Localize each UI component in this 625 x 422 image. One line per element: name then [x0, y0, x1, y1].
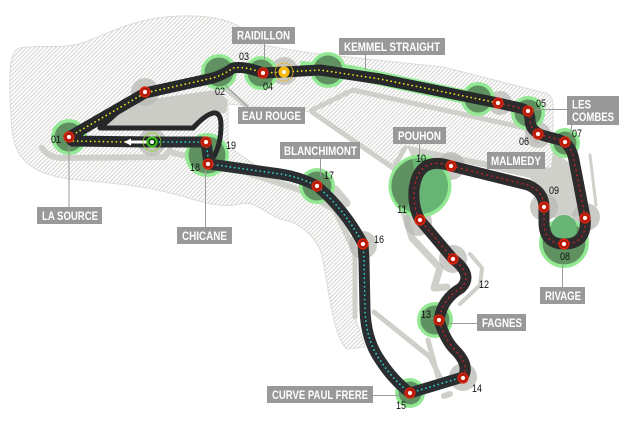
- grey corner markers: [131, 57, 600, 391]
- corner numbers: 15: [396, 400, 406, 412]
- hatched circuit grounds: [10, 16, 553, 349]
- start arrow: [124, 138, 147, 146]
- speed trap marker: [275, 63, 293, 81]
- label: Fagnes: [477, 314, 526, 331]
- label: Malmedy: [487, 152, 545, 169]
- corner numbers: 12: [479, 279, 489, 291]
- label: Blanchimont: [280, 142, 360, 159]
- turn markers: [63, 67, 591, 399]
- label: Curve Paul Frere: [267, 386, 373, 403]
- label: Malmedy: MALMEDY: [491, 156, 541, 168]
- infield paved area: [100, 90, 228, 128]
- pit lane: [100, 110, 221, 158]
- label: Raidillon: RAIDILLON: [237, 30, 290, 42]
- corner numbers: 11: [397, 204, 407, 216]
- label: Curve Paul Frere: CURVE PAUL FRERE: [272, 390, 368, 402]
- corner numbers: 19: [226, 140, 236, 152]
- corner numbers: [51, 51, 582, 412]
- label: Raidillon: [232, 27, 295, 44]
- label: Chicane: [177, 227, 232, 244]
- corner numbers: 05: [536, 98, 546, 110]
- corner numbers: 18: [190, 162, 200, 174]
- label: Eau Rouge: [238, 107, 305, 124]
- corner numbers: 04: [263, 81, 273, 93]
- label: La Source: LA SOURCE: [42, 211, 98, 223]
- label: La Source: [37, 207, 102, 224]
- label: Fagnes: FAGNES: [482, 318, 522, 330]
- green heavy braking zones: [51, 52, 589, 408]
- leader lines: [69, 43, 572, 396]
- label: Les Combes: [567, 96, 619, 125]
- corner numbers: 13: [421, 309, 431, 321]
- label: Pouhon: [393, 127, 446, 144]
- label: Kemmel Straight: KEMMEL STRAIGHT: [344, 42, 440, 54]
- corner numbers: 02: [215, 86, 225, 98]
- label: Les Combes: LES: [572, 100, 591, 112]
- label: Kemmel Straight: [339, 38, 445, 55]
- start line marker: [143, 133, 161, 151]
- track: cyan sector: [152, 142, 463, 393]
- corner numbers: 14: [472, 383, 482, 395]
- label: Les Combes: COMBES: [572, 112, 614, 124]
- track: red sector: [414, 103, 585, 377]
- corner numbers: 01: [51, 134, 61, 146]
- label: Rivage: RIVAGE: [545, 291, 581, 303]
- track: yellow sector: [69, 68, 498, 142]
- run-off roads: [42, 88, 596, 396]
- corner numbers: 17: [324, 170, 334, 182]
- corner numbers: 16: [374, 234, 384, 246]
- label: Chicane: CHICANE: [182, 231, 227, 243]
- corner numbers: 03: [239, 51, 249, 63]
- corner numbers: 08: [560, 251, 570, 263]
- label: Pouhon: POUHON: [398, 131, 441, 143]
- corner numbers: 10: [416, 153, 426, 165]
- label: Rivage: [540, 287, 585, 304]
- corner numbers: 09: [549, 185, 559, 197]
- label: Blanchimont: BLANCHIMONT: [284, 146, 357, 158]
- paddock paved area: [407, 146, 580, 218]
- label: Eau Rouge: EAU ROUGE: [242, 111, 301, 123]
- corner numbers: 06: [519, 136, 529, 148]
- corner numbers: 07: [572, 128, 582, 140]
